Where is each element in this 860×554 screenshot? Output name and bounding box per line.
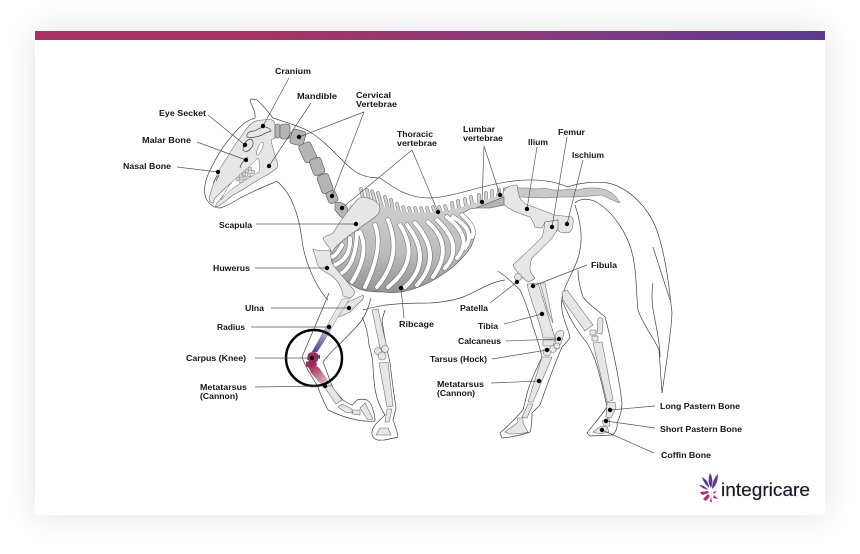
labels: Tarsus (Hock)	[430, 354, 487, 364]
labels: vertebrae	[463, 133, 503, 143]
labels: Radius	[217, 322, 245, 332]
scapula	[323, 197, 380, 254]
labels: Huwerus	[213, 263, 250, 273]
labels: Cranium	[275, 66, 311, 76]
labels: Thoracic	[397, 129, 433, 139]
labels: Lumbar	[463, 124, 496, 134]
far hind leg bones	[562, 290, 616, 434]
labels: Ilium	[528, 137, 548, 147]
logo: integricare	[699, 473, 810, 502]
labels: Cervical	[356, 90, 391, 100]
highlight circle	[286, 330, 342, 386]
labels: Eye Secket	[159, 108, 206, 118]
labels: Long Pastern Bone	[660, 401, 740, 411]
labels: Nasal Bone	[123, 161, 171, 171]
labels: Ischium	[572, 150, 604, 160]
marker dots	[216, 124, 612, 432]
labels: Ribcage	[399, 319, 434, 329]
skull	[209, 119, 278, 207]
horse body outline	[205, 99, 672, 440]
labels: Tibia	[478, 321, 498, 331]
labels: Calcaneus	[458, 336, 501, 346]
labels: Carpus (Knee)	[186, 353, 246, 363]
far foreleg bones	[372, 309, 393, 435]
labels: (Cannon)	[200, 391, 238, 401]
labels: Metatarsus	[437, 379, 484, 389]
leader lines	[177, 78, 655, 453]
labels: (Cannon)	[437, 388, 475, 398]
ribcage and spine	[332, 189, 504, 293]
labels: Coffin Bone	[661, 450, 711, 460]
labels: Patella	[460, 303, 488, 313]
labels: Metatarsus	[200, 382, 247, 392]
labels: Vertebrae	[356, 99, 397, 109]
labels: Short Pastern Bone	[660, 424, 742, 434]
near foreleg bones	[306, 295, 373, 420]
labels: vertebrae	[397, 138, 437, 148]
labels: Mandible	[297, 91, 337, 101]
pelvis and tail bones	[476, 185, 620, 233]
labels: Ulna	[245, 303, 264, 313]
labels: Fibula	[591, 260, 617, 270]
gradient top bar	[35, 31, 825, 40]
labels: Malar Bone	[142, 135, 191, 145]
near hind leg bones	[505, 220, 564, 434]
humerus	[313, 249, 355, 298]
labels: Femur	[558, 127, 586, 137]
cervical vertebrae	[275, 124, 348, 220]
logo: integricare: integricare	[721, 480, 810, 500]
labels: Scapula	[219, 220, 252, 230]
labels	[123, 66, 742, 460]
